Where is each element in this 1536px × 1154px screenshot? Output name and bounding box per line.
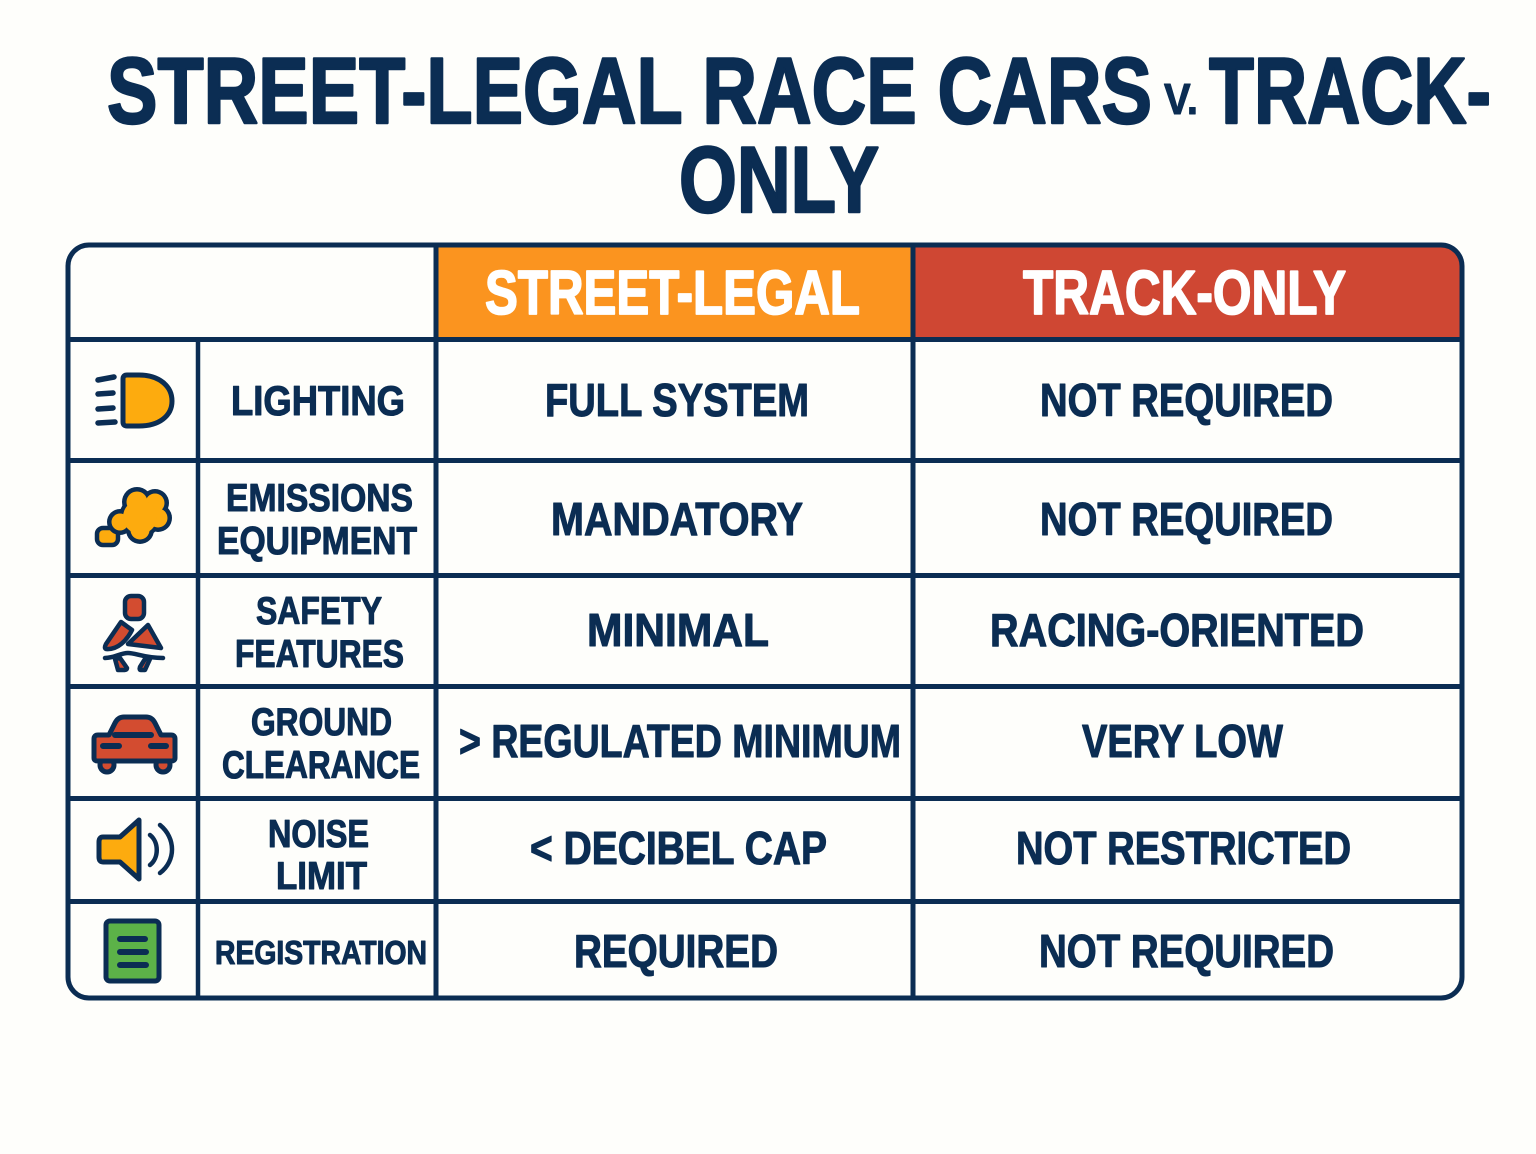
row: noise limit <box>99 813 1351 898</box>
row: emissions equipment: EMISSIONS <box>226 477 413 520</box>
row: emissions equipment: NOT REQUIRED <box>1040 493 1333 545</box>
title: ONLY <box>679 127 879 232</box>
row: safety features: RACING-ORIENTED <box>990 604 1364 656</box>
row: emissions equipment <box>97 477 1333 563</box>
row: lighting <box>98 374 1333 426</box>
row: noise limit: < DECIBEL CAP <box>530 822 827 874</box>
title: STREET-LEGAL RACE CARS <box>107 38 1152 143</box>
row: registration: REQUIRED <box>574 925 778 977</box>
table grid <box>68 245 1462 998</box>
header: track-only <box>913 247 1461 339</box>
icon: registration document <box>106 921 159 981</box>
row: ground clearance: VERY LOW <box>1082 715 1283 767</box>
icon: exhaust cloud <box>97 487 172 545</box>
row: registration <box>106 921 1334 981</box>
row: noise limit: NOISE <box>268 813 369 856</box>
row: lighting: NOT REQUIRED <box>1040 374 1333 426</box>
row: ground clearance: CLEARANCE <box>222 744 420 787</box>
title: V. <box>1164 75 1198 124</box>
row: safety features: FEATURES <box>235 633 404 676</box>
row: noise limit: LIMIT <box>276 855 367 898</box>
header: street-legal: STREET-LEGAL <box>485 259 860 328</box>
row: emissions equipment: MANDATORY <box>551 493 803 545</box>
row: registration: NOT REQUIRED <box>1039 925 1334 977</box>
row: emissions equipment: EQUIPMENT <box>217 520 417 563</box>
header: street-legal <box>436 247 913 339</box>
row: safety features: SAFETY <box>256 590 382 633</box>
row: lighting: LIGHTING <box>231 377 405 424</box>
row: ground clearance <box>94 701 1283 787</box>
icon: seat belt <box>105 596 163 670</box>
row: ground clearance: GROUND <box>251 701 392 744</box>
row: registration: REGISTRATION <box>215 934 427 971</box>
row: noise limit: NOT RESTRICTED <box>1016 822 1351 874</box>
icon: red car <box>94 717 175 772</box>
row: safety features <box>105 590 1364 676</box>
title <box>107 38 1491 232</box>
row: lighting: FULL SYSTEM <box>545 374 809 426</box>
icon: headlight <box>98 375 172 426</box>
panel: comparison table <box>68 245 1462 998</box>
header: track-only: TRACK-ONLY <box>1023 259 1346 328</box>
row: ground clearance: > REGULATED MINIMUM <box>459 715 901 767</box>
icon: speaker <box>99 820 172 879</box>
row: safety features: MINIMAL <box>587 604 769 656</box>
